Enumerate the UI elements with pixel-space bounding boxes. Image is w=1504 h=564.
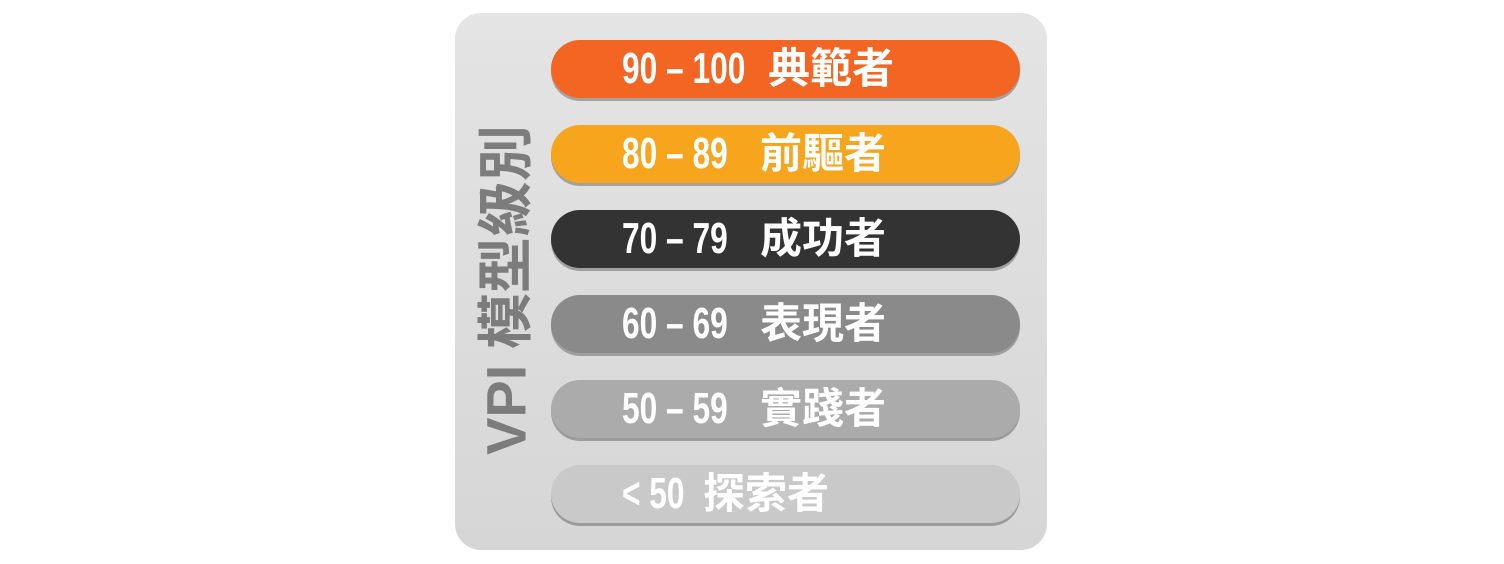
panel: VPI levels xyxy=(455,13,1047,550)
level: 80-89 xyxy=(551,125,1020,183)
level: 60-69 xyxy=(551,295,1020,353)
level: 70-79 xyxy=(551,210,1020,268)
level: 50-59: 實踐者 xyxy=(760,385,886,432)
level: <50: 探索者 xyxy=(703,470,829,517)
level: 50-59: 50 – 59 xyxy=(622,384,728,433)
level: <50: < 50 xyxy=(622,469,685,518)
level: 50-59 xyxy=(551,380,1020,438)
level: 80-89: 80 – 89 xyxy=(622,129,728,178)
level: 70-79: 70 – 79 xyxy=(622,214,728,263)
level: 90-100: 典範者 xyxy=(768,45,894,92)
level: 60-69: 表現者 xyxy=(760,300,886,347)
level: <50 xyxy=(551,465,1020,523)
level: 70-79: 成功者 xyxy=(760,215,886,262)
level: 60-69: 60 – 69 xyxy=(622,299,728,348)
level: 90-100 xyxy=(551,40,1020,98)
level: 90-100: 90 – 100 xyxy=(622,44,745,93)
vertical title: VPI 模型級別 xyxy=(474,125,538,455)
level: 80-89: 前驅者 xyxy=(760,130,886,177)
